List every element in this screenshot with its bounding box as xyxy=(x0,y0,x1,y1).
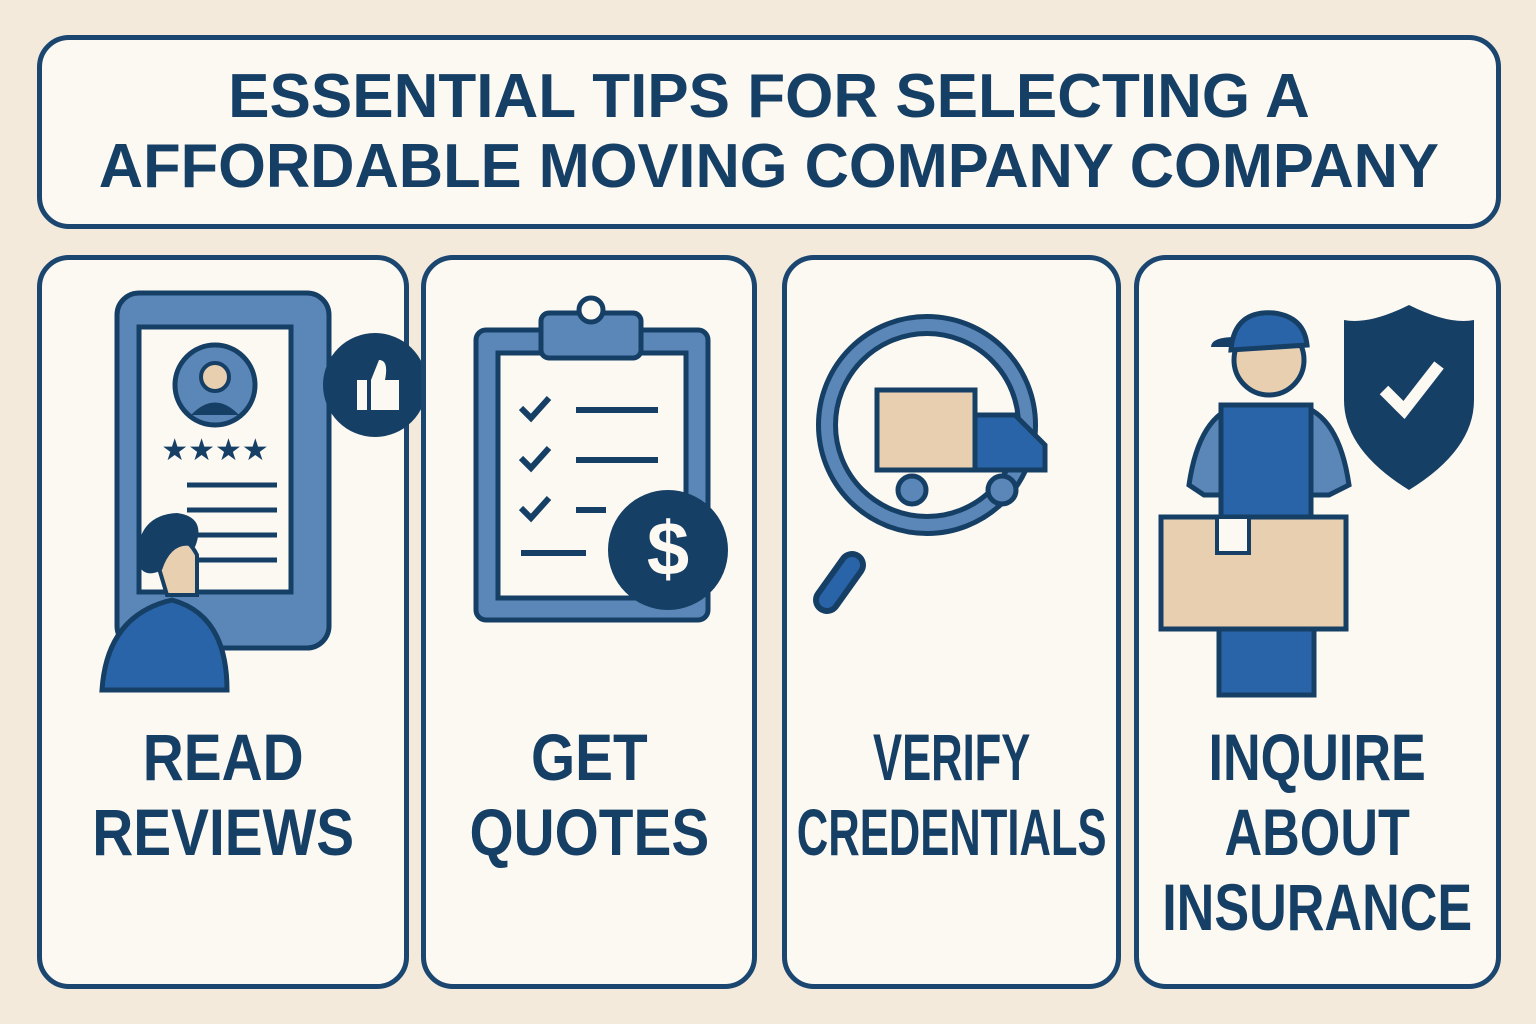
label: QUOTES xyxy=(469,795,709,869)
label xyxy=(469,720,709,869)
icon: phone reviews xyxy=(99,290,421,692)
title xyxy=(37,35,1501,229)
label: READ xyxy=(143,720,303,794)
icon: mover with shield xyxy=(1158,305,1474,698)
icon: magnifier truck xyxy=(813,314,1048,614)
panel: read reviews xyxy=(37,255,409,989)
label: GET xyxy=(531,720,647,794)
label: INQUIRE xyxy=(1209,720,1426,794)
label: CREDENTIALS xyxy=(797,795,1106,869)
panel: get quotes xyxy=(421,255,757,989)
icon: phone reviews: ★★★★ xyxy=(161,434,269,467)
label: VERIFY xyxy=(873,720,1030,794)
icon: clipboard: $ xyxy=(647,507,689,592)
title: AFFORDABLE MOVING COMPANY COMPANY xyxy=(99,132,1439,201)
label xyxy=(797,720,1106,869)
label: INSURANCE xyxy=(1163,870,1472,944)
panel: verify credentials xyxy=(782,255,1121,989)
icon: clipboard xyxy=(474,296,728,622)
title: ESSENTIAL TIPS FOR SELECTING A xyxy=(228,62,1310,131)
label xyxy=(92,720,354,869)
label: REVIEWS xyxy=(92,795,354,869)
label xyxy=(1163,720,1472,944)
label: ABOUT xyxy=(1225,795,1410,869)
panel: inquire insurance xyxy=(1134,255,1501,989)
